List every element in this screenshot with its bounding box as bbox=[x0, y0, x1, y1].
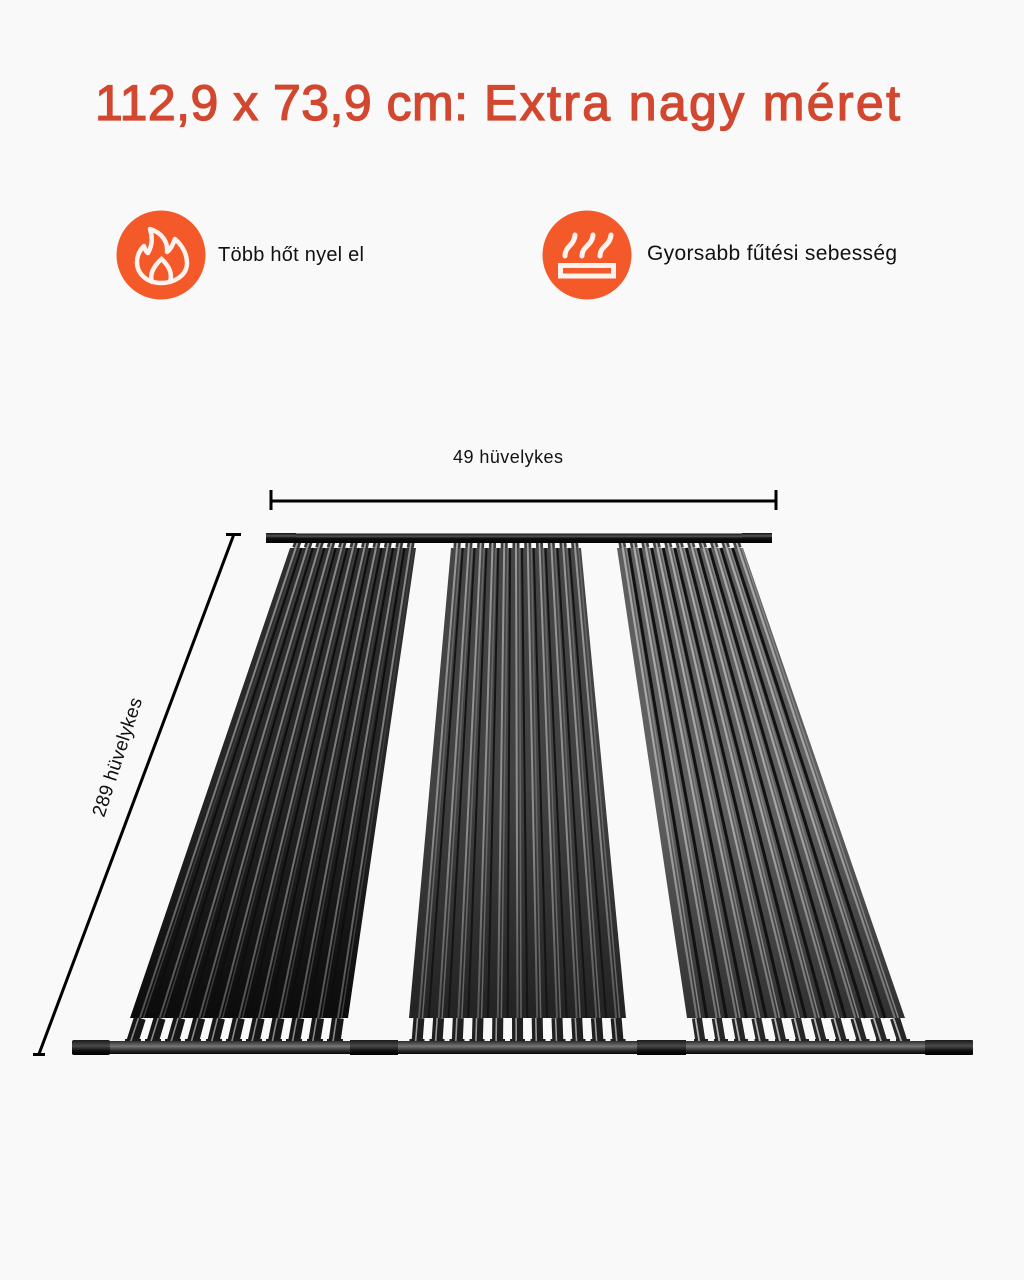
title: Extra nagy méret bbox=[484, 75, 900, 131]
feature: absorbs more heat bbox=[116, 210, 364, 300]
label: absorbs more heat: Több hőt nyel el bbox=[218, 244, 364, 266]
title: 112,9 x 73,9 cm: bbox=[95, 75, 468, 131]
feature: faster heating bbox=[542, 210, 897, 300]
length dimension bbox=[33, 534, 241, 1054]
width arrow bbox=[271, 490, 776, 510]
width dimension bbox=[271, 447, 776, 510]
panel 1: left bbox=[130, 540, 416, 1043]
icon: heating steam bbox=[542, 210, 632, 300]
solar panel diagram bbox=[72, 533, 973, 1055]
label: faster heating: Gyorsabb fűtési sebesség bbox=[647, 242, 897, 265]
top header pipe bbox=[266, 533, 772, 543]
length arrow bbox=[33, 534, 241, 1054]
width label: 49 hüvelykes bbox=[453, 447, 563, 467]
bottom header pipe bbox=[72, 1040, 973, 1055]
icon: flame bbox=[116, 210, 206, 300]
length label: 289 hüvelykes bbox=[89, 695, 147, 820]
panel 2: middle bbox=[409, 540, 626, 1043]
panel 3: right bbox=[617, 540, 905, 1043]
